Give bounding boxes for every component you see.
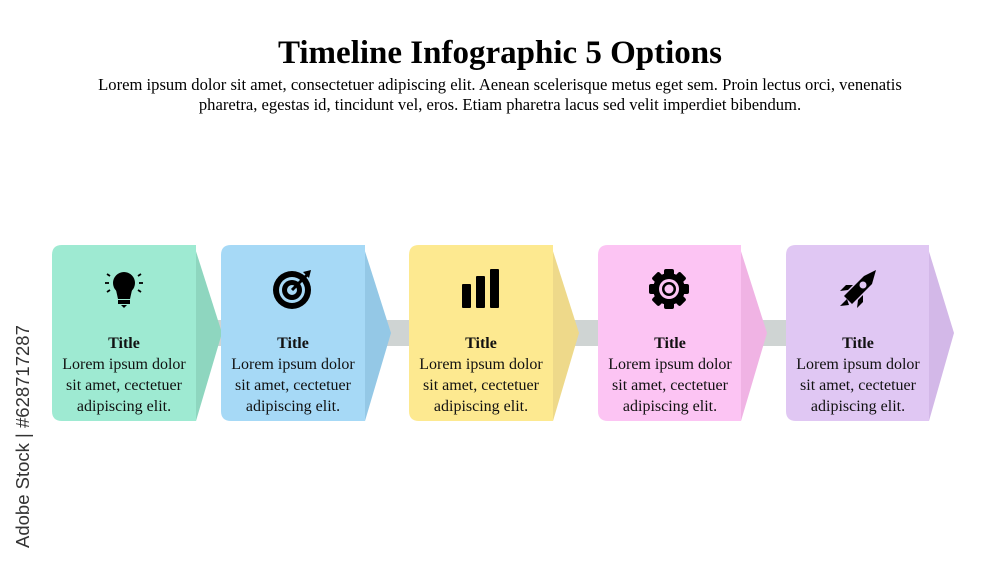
card 5 text xyxy=(796,335,920,415)
step 4 shape xyxy=(598,245,767,421)
title: Timeline Infographic 5 Options xyxy=(278,35,722,71)
card 5 text: Title xyxy=(842,335,874,352)
icon: target xyxy=(273,270,311,309)
card 3 text xyxy=(419,335,543,415)
card 2 text: Lorem ipsum dolor xyxy=(231,356,355,373)
card 1 text xyxy=(62,335,186,415)
card 3 text: Title xyxy=(465,335,497,352)
card 1 text: sit amet, cectetuer xyxy=(66,377,182,394)
card 3 text: sit amet, cectetuer xyxy=(423,377,539,394)
subtitle text: pharetra, egestas id, tincidunt vel, eros. Etiam pharetra lacus sed velit imperdiet bibendum. xyxy=(199,95,801,114)
card 2 text: Title xyxy=(277,335,309,352)
card 3 text: Lorem ipsum dolor xyxy=(419,356,543,373)
step 3 shape xyxy=(409,245,579,421)
connector bar xyxy=(196,320,949,346)
step 2 shape xyxy=(221,245,391,421)
subtitle text: Lorem ipsum dolor sit amet, consectetuer adipiscing elit. Aenean scelerisque metus eget sem. Proin lectus orci, venenatis xyxy=(98,75,902,94)
card 2 text: adipiscing elit. xyxy=(246,398,340,415)
card 5 text: adipiscing elit. xyxy=(811,398,905,415)
card 2 text: sit amet, cectetuer xyxy=(235,377,351,394)
icon: rocket xyxy=(840,270,876,308)
card 1 text: Title xyxy=(108,335,140,352)
card 3 text: adipiscing elit. xyxy=(434,398,528,415)
icon: light bulb xyxy=(105,272,143,308)
card 1 text: adipiscing elit. xyxy=(77,398,171,415)
card 5 text: Lorem ipsum dolor xyxy=(796,356,920,373)
icon: bar chart xyxy=(462,269,499,308)
watermark credit: Adobe Stock | #628717287 xyxy=(12,325,33,548)
step 1 shape xyxy=(52,245,222,421)
card 2 text xyxy=(231,335,355,415)
card 4 text: Title xyxy=(654,335,686,352)
card 4 text: adipiscing elit. xyxy=(623,398,717,415)
card 5 text: sit amet, cectetuer xyxy=(800,377,916,394)
card 4 text: sit amet, cectetuer xyxy=(612,377,728,394)
step 5 shape xyxy=(786,245,954,421)
subtitle text xyxy=(98,75,902,114)
card 1 text: Lorem ipsum dolor xyxy=(62,356,186,373)
card 4 text xyxy=(608,335,732,415)
icon: gear xyxy=(649,269,689,309)
card 4 text: Lorem ipsum dolor xyxy=(608,356,732,373)
